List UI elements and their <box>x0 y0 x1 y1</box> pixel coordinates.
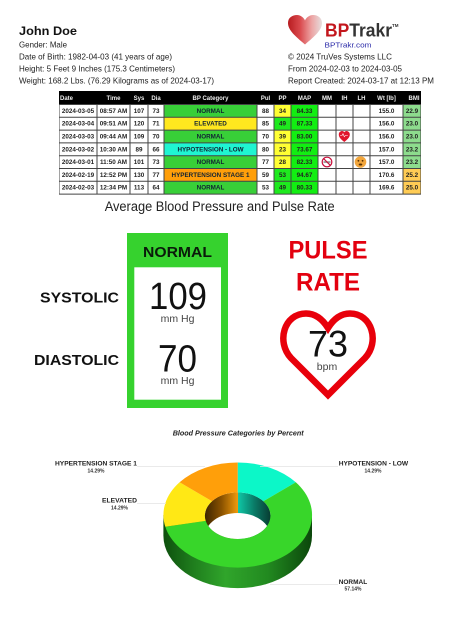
panel: average blood pressure <box>127 233 228 408</box>
row 2024-02-03: 80.33 <box>297 185 313 192</box>
donut chart <box>163 462 312 588</box>
diastolic unit: mm Hg <box>161 375 195 387</box>
row 2024-03-05: 73 <box>152 108 160 115</box>
row 2024-03-04: 156.0 <box>379 121 395 128</box>
row 2024-03-03: 156.0 <box>379 134 395 140</box>
row 2024-02-03: 53 <box>262 185 269 192</box>
row 2024-03-02: 10:30 AM <box>100 146 127 153</box>
trademark: TM <box>392 23 399 28</box>
table header: Wt [lb] <box>377 96 396 102</box>
table header: Pul <box>261 96 270 102</box>
logo url: BPTrakr.com <box>324 40 372 50</box>
diastolic value: 70 <box>158 339 197 381</box>
row 2024-03-05: 88 <box>262 108 269 115</box>
report details <box>288 52 434 86</box>
label: elevated: 14.29% <box>111 506 129 512</box>
table header: MM <box>322 96 332 102</box>
row 2024-02-19: 77 <box>152 172 160 179</box>
patient details: Date of Birth: 1982-04-03 (41 years of age) <box>19 52 172 62</box>
row 2024-03-04: 2024-03-04 <box>62 121 95 128</box>
row 2024-03-01: 23.2 <box>406 159 419 166</box>
report details: Report Created: 2024-03-17 at 12:13 PM <box>288 76 434 86</box>
row 2024-03-03: 109 <box>134 134 145 140</box>
slice: hypotension low <box>238 462 296 501</box>
slice: hypertension stage 1 <box>180 462 238 501</box>
green status frame <box>127 233 228 408</box>
row 2024-02-03: NORMAL <box>197 185 224 192</box>
row 2024-03-05 <box>62 108 418 113</box>
row 2024-03-03: 23.0 <box>406 134 419 140</box>
row 2024-03-02: 23 <box>279 146 286 153</box>
report details: From 2024-02-03 to 2024-03-05 <box>288 64 402 74</box>
row 2024-03-04: 85 <box>262 121 269 128</box>
icon: headache face <box>355 156 366 168</box>
row 2024-03-04: 23.0 <box>406 121 419 128</box>
row 2024-03-03: NORMAL <box>197 134 224 140</box>
row 2024-03-04: 87.33 <box>297 121 313 128</box>
label: systolic: SYSTOLIC <box>40 291 120 307</box>
label: elevated: ELEVATED <box>102 497 137 504</box>
row 2024-03-02: 66 <box>152 146 160 153</box>
patient name: John Doe <box>19 24 77 38</box>
slice: normal <box>165 482 312 568</box>
row 2024-02-19: 94.67 <box>297 172 313 179</box>
category cell colours <box>164 104 257 194</box>
row 2024-03-04: 09:51 AM <box>100 121 127 128</box>
slice: elevated <box>163 482 212 527</box>
pulse heading line 2: RATE <box>296 269 360 297</box>
BMI cell colours <box>403 104 421 194</box>
row 2024-02-03: 2024-02-03 <box>62 185 95 192</box>
row 2024-02-03: 49 <box>279 185 286 192</box>
row 2024-03-02: 157.0 <box>379 146 395 153</box>
status heading: NORMAL <box>143 245 212 261</box>
logo wordmark: BPTrakr <box>325 20 392 40</box>
label: normal: NORMAL <box>339 579 367 586</box>
leader lines <box>137 466 338 584</box>
row 2024-03-02: 2024-03-02 <box>62 146 95 153</box>
table header: Time <box>107 96 121 102</box>
row 2024-03-01: NORMAL <box>197 159 224 166</box>
row 2024-03-01: 77 <box>262 159 269 166</box>
row 2024-02-03: 64 <box>152 185 160 192</box>
row 2024-03-01: 157.0 <box>379 159 395 166</box>
panel: pulse rate <box>283 236 373 395</box>
hole opening <box>208 513 267 539</box>
white reading panel <box>134 267 221 400</box>
row 2024-03-02: 89 <box>135 146 143 153</box>
row 2024-02-03: 169.6 <box>379 185 395 192</box>
row 2024-02-19: HYPERTENSION STAGE 1 <box>172 172 250 179</box>
table header: LH <box>358 96 366 102</box>
logo: BPTrakr <box>288 15 399 50</box>
row 2024-02-19: 2024-02-19 <box>62 172 95 179</box>
row 2024-02-19: 130 <box>134 172 145 179</box>
label: diastolic: DIASTOLIC <box>34 353 120 369</box>
label: elevated <box>102 497 137 512</box>
grid lines <box>59 104 421 194</box>
table header: MAP <box>298 96 311 102</box>
row 2024-03-03: 83.00 <box>297 134 313 140</box>
row 2024-03-05: 22.9 <box>406 108 419 115</box>
row 2024-03-03: 39 <box>279 134 286 140</box>
icon: no smoking <box>322 157 332 167</box>
row 2024-02-19: 170.6 <box>379 172 395 179</box>
row 2024-03-02: 23.2 <box>406 146 419 153</box>
table header: Date <box>60 96 74 102</box>
row 2024-02-19: 25.2 <box>406 172 419 179</box>
row 2024-03-03: 2024-03-03 <box>62 134 95 140</box>
systolic unit: mm Hg <box>161 313 195 325</box>
patient details: Weight: 168.2 Lbs. (76.29 Kilograms as of 2024-03-17) <box>19 76 214 86</box>
row 2024-03-05: NORMAL <box>197 108 224 115</box>
label: normal <box>339 579 367 593</box>
systolic value: 109 <box>149 276 207 318</box>
row 2024-02-19: 59 <box>262 172 269 179</box>
row 2024-02-03: 25.0 <box>406 185 419 192</box>
label: hypotension low: 14.29% <box>365 468 382 474</box>
label: hypotension low: HYPOTENSION - LOW <box>339 460 409 467</box>
row 2024-03-01: 82.33 <box>297 159 313 166</box>
label: hypertension stage 1: 14.29% <box>88 468 105 474</box>
row 2024-03-01: 2024-03-01 <box>62 159 95 166</box>
row 2024-03-04 <box>62 121 418 126</box>
table header: Sys <box>134 96 145 102</box>
outer wall <box>163 515 312 588</box>
pulse unit: bpm <box>317 361 337 373</box>
label: hypertension stage 1: HYPERTENSION STAGE 1 <box>55 460 137 467</box>
row 2024-03-01: 73 <box>152 159 160 166</box>
icon: heart outline <box>283 314 373 395</box>
patient details: Gender: Male <box>19 40 67 50</box>
row 2024-03-03 <box>62 134 418 138</box>
row 2024-02-03: 12:34 PM <box>100 185 127 192</box>
icon: irregular heartbeat heart <box>339 131 350 142</box>
row 2024-03-02: 80 <box>262 146 269 153</box>
row 2024-03-05: 155.0 <box>379 108 395 115</box>
patient details <box>19 40 214 86</box>
patient details: Height: 5 Feet 9 Inches (175.3 Centimeters) <box>19 64 175 74</box>
row 2024-03-03: 70 <box>262 134 269 140</box>
row 2024-03-02 <box>62 147 418 152</box>
row 2024-03-01: 101 <box>134 159 145 166</box>
row 2024-03-01: 28 <box>279 159 286 166</box>
icon: striped heart <box>288 15 322 44</box>
pulse heading line 1: PULSE <box>288 236 368 264</box>
row 2024-03-01: 11:50 AM <box>100 159 127 166</box>
label: normal: 57.14% <box>345 587 362 593</box>
row 2024-03-05: 84.33 <box>297 108 313 115</box>
label: hypotension low <box>339 460 409 474</box>
MAP cell colours <box>291 104 318 194</box>
pulse value: 73 <box>308 324 348 365</box>
heading: average blood pressure: Average Blood Pressure and Pulse Rate <box>105 199 335 214</box>
row 2024-02-19: 12:52 PM <box>100 172 127 179</box>
row 2024-03-05: 34 <box>279 108 286 115</box>
row 2024-03-03: 70 <box>152 134 160 140</box>
row 2024-03-04: 120 <box>134 121 145 128</box>
table header <box>59 91 421 104</box>
table header: Dia <box>151 96 161 102</box>
pulse pressure cell colours <box>274 104 291 194</box>
table header: BP Category <box>193 96 229 102</box>
row 2024-03-05: 107 <box>134 108 145 115</box>
row 2024-03-02: 73.67 <box>297 146 313 153</box>
row 2024-02-19: 53 <box>279 172 286 179</box>
row 2024-02-19 <box>62 172 418 177</box>
row 2024-03-01 <box>62 160 418 164</box>
row 2024-03-05: 08:57 AM <box>100 108 127 115</box>
report details: © 2024 TruVes Systems LLC <box>288 52 392 62</box>
row 2024-02-03 <box>62 185 418 190</box>
row 2024-03-04: 49 <box>279 121 286 128</box>
row 2024-03-03: 09:44 AM <box>100 134 127 140</box>
chart title: Blood Pressure Categories by Percent <box>173 428 304 437</box>
readings table <box>59 91 421 194</box>
table header: BMI <box>408 96 420 102</box>
inner wall <box>205 492 270 539</box>
row 2024-03-02: HYPOTENSION - LOW <box>177 146 244 153</box>
table header: IH <box>342 96 348 102</box>
row 2024-02-03: 113 <box>134 185 145 192</box>
row 2024-03-05: 2024-03-05 <box>62 108 95 115</box>
label: hypertension stage 1 <box>55 460 137 474</box>
row 2024-03-04: ELEVATED <box>194 121 227 128</box>
table header: PP <box>278 96 287 102</box>
row 2024-03-04: 71 <box>152 121 160 128</box>
